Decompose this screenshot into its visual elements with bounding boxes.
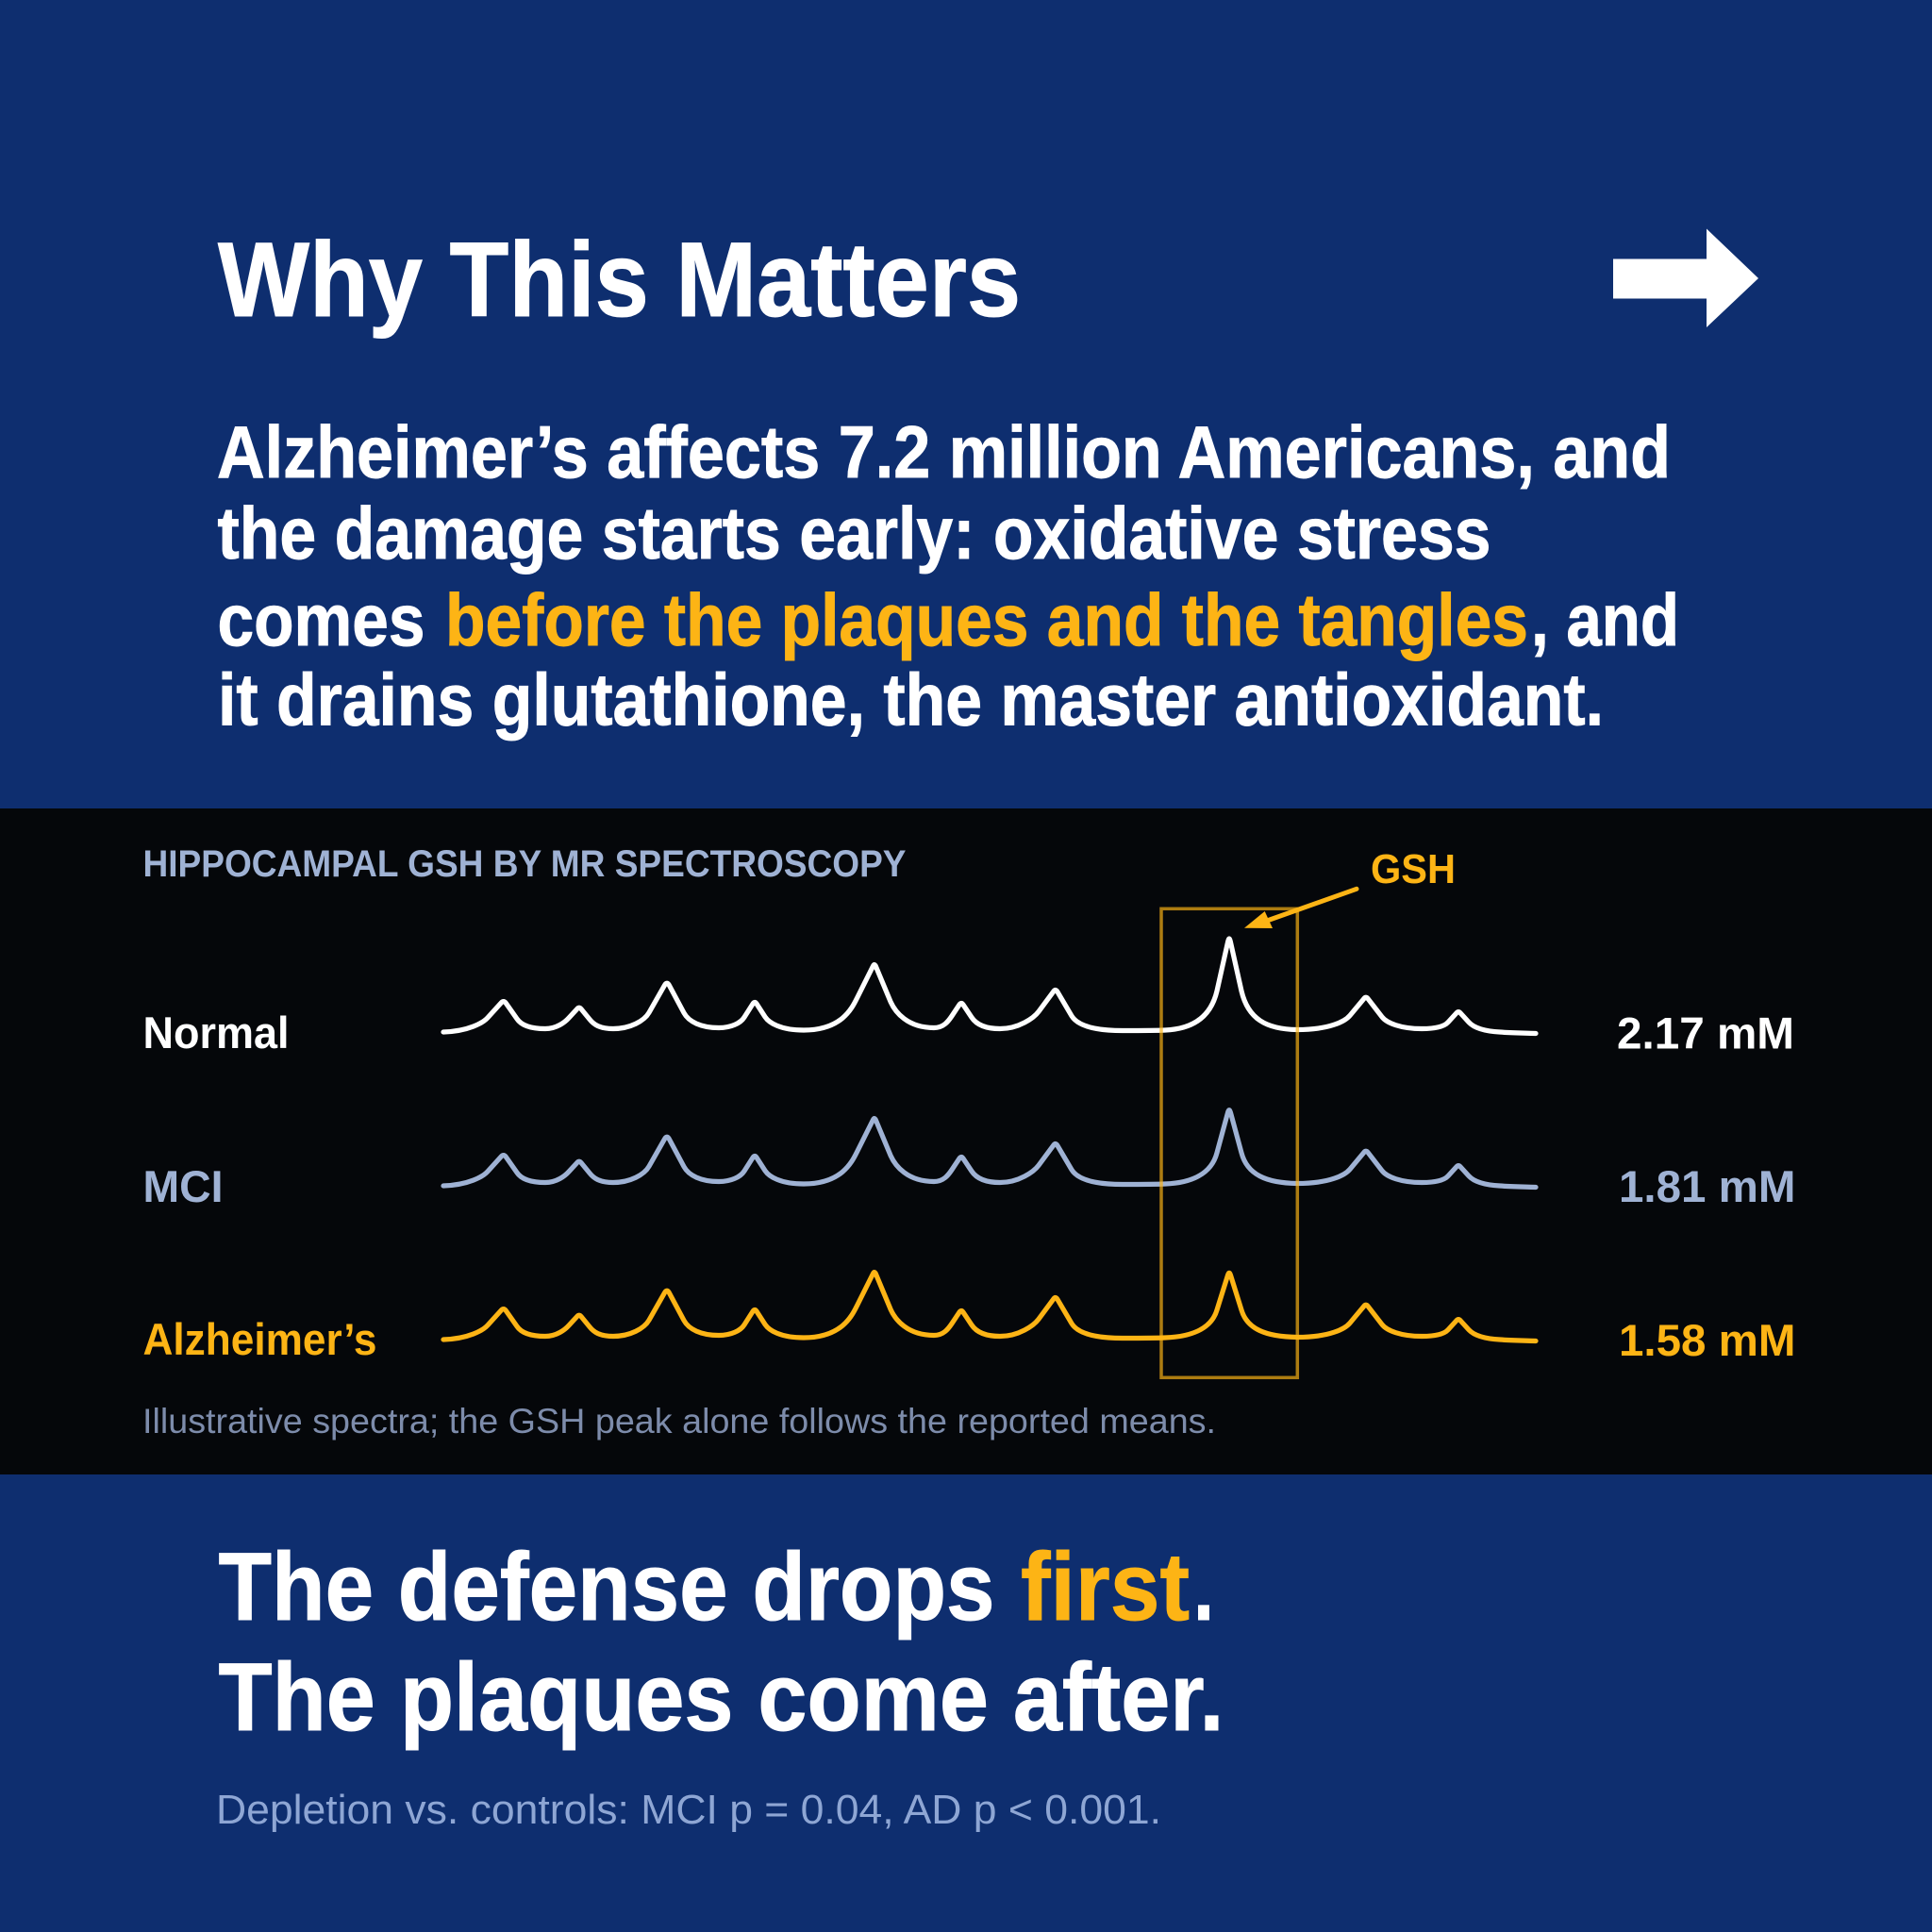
spectrum: MCI [443, 1110, 1536, 1187]
intro paragraph: , and [1531, 578, 1679, 661]
statistics note: Depletion vs. controls: MCI p = 0.04, AD p < 0.001. [216, 1787, 1161, 1833]
spectrum: Normal [443, 939, 1536, 1034]
intro paragraph: before the plaques and the tangles [445, 578, 1528, 661]
conclusion headline: . [1193, 1533, 1214, 1641]
intro paragraph [217, 410, 1679, 741]
chart footnote: Illustrative spectra; the GSH peak alone follows the reported means. [142, 1402, 1216, 1441]
panel background [0, 808, 1932, 1474]
row label: MCI: MCI [143, 1161, 223, 1211]
value: MCI: 1.81 mM [1619, 1161, 1796, 1211]
intro paragraph: comes [217, 578, 425, 661]
conclusion headline [219, 1533, 1224, 1751]
GSH label: GSH [1371, 846, 1456, 892]
panel: spectroscopy chart [0, 808, 1932, 1474]
value: Normal: 2.17 mM [1617, 1008, 1794, 1058]
row label: Normal: Normal [143, 1008, 289, 1058]
chart heading: HIPPOCAMPAL GSH BY MR SPECTROSCOPY [143, 843, 907, 885]
conclusion headline: The plaques come after. [219, 1643, 1224, 1751]
icon: right arrow [1613, 228, 1758, 327]
conclusion headline: first [1021, 1533, 1190, 1641]
GSH highlight box [1161, 908, 1297, 1377]
value: Alzheimer's: 1.58 mM [1619, 1315, 1796, 1365]
intro paragraph: it drains glutathione, the master antioxidant. [218, 658, 1604, 741]
intro paragraph: Alzheimer’s affects 7.2 million Americans, and [217, 410, 1671, 493]
row label: Alzheimer's: Alzheimer’s [143, 1314, 377, 1364]
title: Why This Matters [218, 221, 1021, 339]
arrow: GSH label to peak [1244, 889, 1357, 928]
spectrum: Alzheimer's [443, 1273, 1536, 1341]
conclusion headline: The defense drops [219, 1533, 994, 1641]
intro paragraph: the damage starts early: oxidative stress [217, 491, 1491, 575]
